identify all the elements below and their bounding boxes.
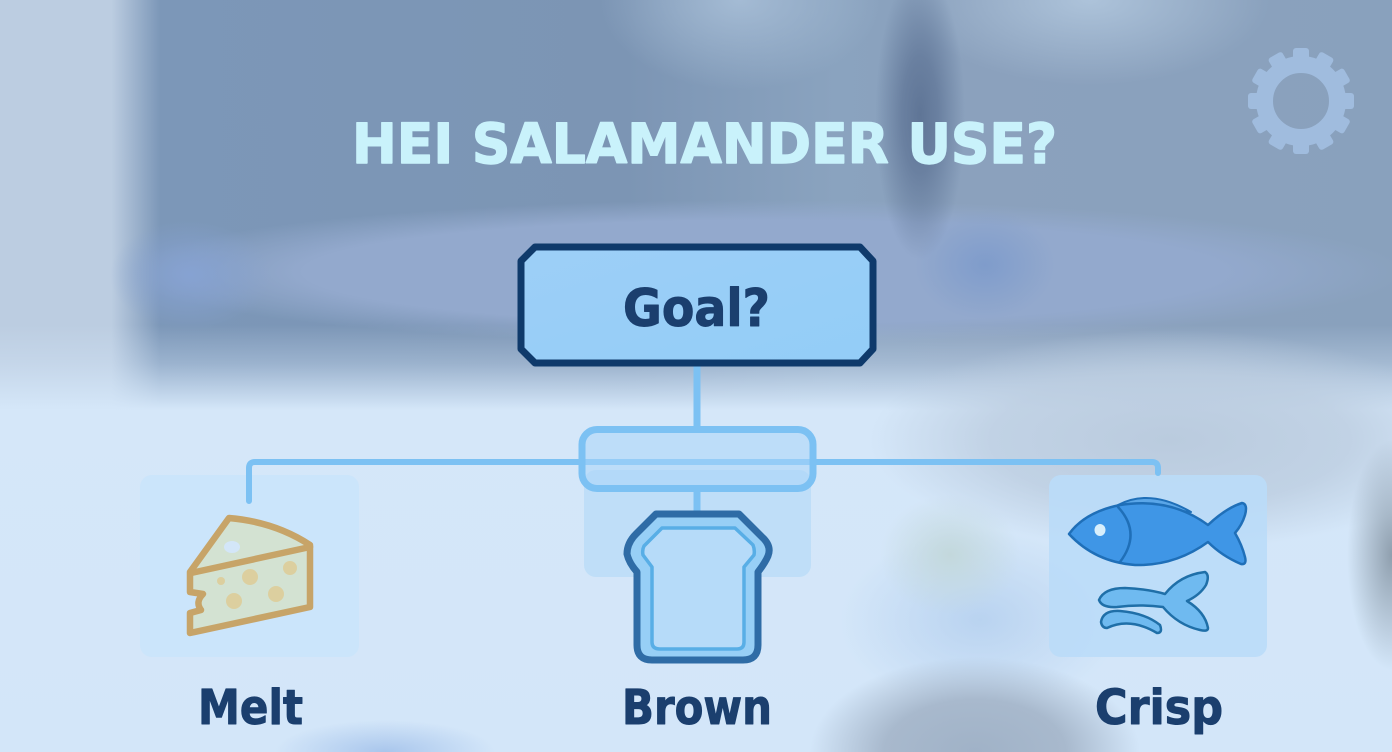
connector lines bbox=[249, 366, 1158, 512]
panel: melt backdrop bbox=[140, 475, 359, 657]
decision node: goal bbox=[521, 247, 873, 363]
icon: fish bbox=[1069, 498, 1246, 633]
small fish bbox=[1099, 572, 1208, 633]
gear icon bbox=[1248, 48, 1354, 154]
panel: brown backdrop bbox=[584, 470, 811, 577]
panel: crisp backdrop bbox=[1049, 475, 1267, 657]
icon: bread slice bbox=[627, 514, 769, 660]
label: brown: Brown bbox=[622, 680, 772, 736]
decision junction box bbox=[582, 430, 813, 488]
icon: cheese wedge bbox=[190, 518, 310, 633]
goal label: Goal? bbox=[623, 279, 770, 339]
large fish bbox=[1069, 498, 1246, 565]
label: melt: Melt bbox=[198, 680, 303, 736]
title: HEI SALAMANDER USE? bbox=[352, 112, 1057, 176]
label: crisp: Crisp bbox=[1095, 680, 1223, 736]
